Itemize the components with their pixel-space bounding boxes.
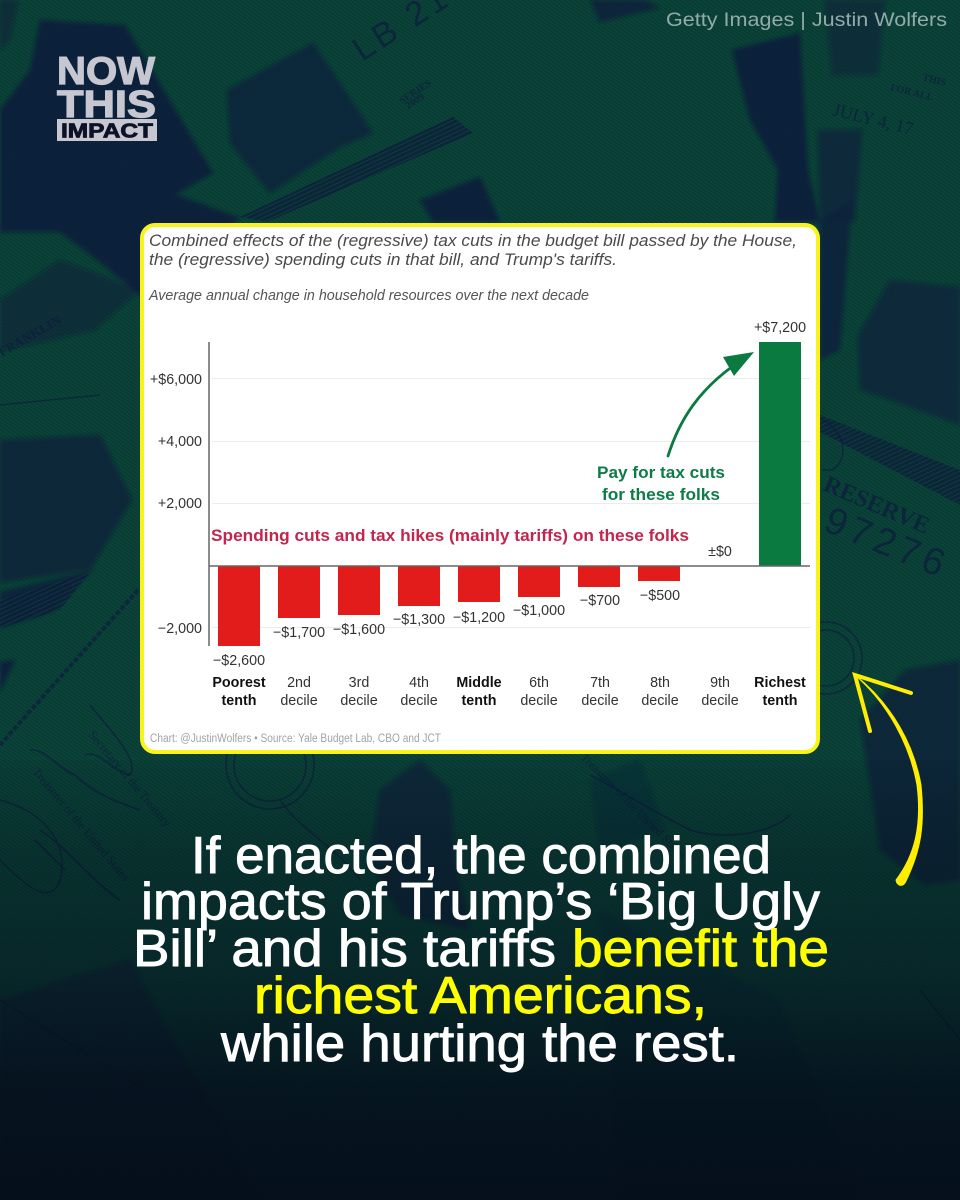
- banknote print: Secretary of the Treasury: [86, 728, 174, 830]
- chart source: Chart: @JustinWolfers • Source: Yale Budget Lab, CBO and JCT: [150, 733, 441, 745]
- decorative hatch stripes: [0, 117, 960, 628]
- banknote print: [0, 0, 956, 884]
- chart title: [149, 231, 797, 269]
- banknote print: JULY 4, 17: [831, 99, 915, 139]
- category labels: tenth: [222, 693, 256, 709]
- headline: benefit the: [572, 920, 829, 978]
- value labels: ±$0: [708, 544, 732, 560]
- value labels: −$1,300: [393, 612, 445, 628]
- chart subtitle: Average annual change in household resources over the next decade: [148, 288, 589, 304]
- banknote print: FOR ALL: [889, 82, 935, 104]
- logo: NowThis Impact: IMPACT: [61, 120, 153, 142]
- category labels: tenth: [462, 693, 496, 709]
- category labels: Richest: [754, 675, 806, 691]
- category labels: Middle: [456, 675, 502, 691]
- photo credit: Getty Images | Justin Wolfers: [666, 9, 947, 31]
- green annotation: Pay for tax cuts: [597, 463, 725, 482]
- headline: [133, 827, 829, 1073]
- y axis labels: [150, 372, 202, 637]
- banknote print: 97276: [819, 499, 956, 587]
- category labels: Poorest: [212, 675, 266, 691]
- green annotation: [597, 463, 725, 504]
- headline: If enacted, the combined: [191, 827, 771, 885]
- bar chart: [150, 320, 810, 709]
- category labels: decile: [581, 693, 619, 709]
- positive bar: richest tenth: [759, 342, 801, 566]
- category labels: decile: [701, 693, 739, 709]
- value labels: −$700: [580, 593, 620, 609]
- arrow: green: [668, 352, 754, 456]
- y axis labels: −2,000: [158, 621, 202, 637]
- category labels: decile: [280, 693, 318, 709]
- banknote print: THIS: [921, 72, 948, 89]
- red annotation: Spending cuts and tax hikes (mainly tariffs) on these folks: [211, 526, 689, 545]
- category labels: 4th: [409, 675, 429, 691]
- green annotation: for these folks: [602, 485, 720, 504]
- value labels: −$1,600: [333, 622, 385, 638]
- y axis labels: +2,000: [158, 496, 202, 512]
- category labels: 3rd: [349, 675, 369, 691]
- category labels: decile: [340, 693, 378, 709]
- category labels: [212, 675, 806, 709]
- category labels: decile: [520, 693, 558, 709]
- headline: while hurting the rest.: [220, 1015, 739, 1073]
- category labels: 2nd: [287, 675, 311, 691]
- value labels: −$1,000: [513, 603, 565, 619]
- value labels: −$1,200: [453, 610, 505, 626]
- y axis labels: +$6,000: [150, 372, 202, 388]
- banknote print: 2009: [404, 91, 426, 112]
- value labels: −$2,600: [213, 653, 265, 669]
- category labels: 7th: [590, 675, 610, 691]
- headline: impacts of Trump’s ‘Big Ugly: [141, 873, 820, 931]
- negative bars: [218, 566, 680, 646]
- value labels: −$500: [640, 588, 680, 604]
- banknote print: SERIES: [398, 78, 434, 107]
- headline: richest Americans,: [254, 967, 707, 1025]
- category labels: 8th: [650, 675, 670, 691]
- arrow: yellow pointing to chart: [855, 675, 922, 885]
- category labels: 6th: [529, 675, 549, 691]
- logo: NowThis Impact: NOW: [57, 50, 155, 93]
- banknote print: RESERVE: [820, 472, 933, 539]
- value labels: −$1,700: [273, 625, 325, 641]
- headline: Bill’ and his tariffs: [133, 920, 556, 978]
- y axis labels: +4,000: [158, 434, 202, 450]
- category labels: tenth: [763, 693, 797, 709]
- logo: NowThis Impact: [57, 50, 157, 142]
- panel: chart card: [142, 225, 818, 752]
- category labels: decile: [641, 693, 679, 709]
- chart title: the (regressive) spending cuts in that bill, and Trump's tariffs.: [149, 250, 617, 269]
- banknote print: Treasurer of the United States: [30, 765, 133, 884]
- chart title: Combined effects of the (regressive) tax cuts in the budget bill passed by the House,: [149, 231, 797, 250]
- value labels: +$7,200: [754, 320, 806, 336]
- banknote details: [0, 395, 960, 1100]
- banknote print: Treasurer of the United States: [578, 750, 689, 862]
- value labels: [213, 320, 806, 669]
- category labels: decile: [400, 693, 438, 709]
- logo: NowThis Impact: THIS: [57, 84, 156, 126]
- category labels: 9th: [710, 675, 730, 691]
